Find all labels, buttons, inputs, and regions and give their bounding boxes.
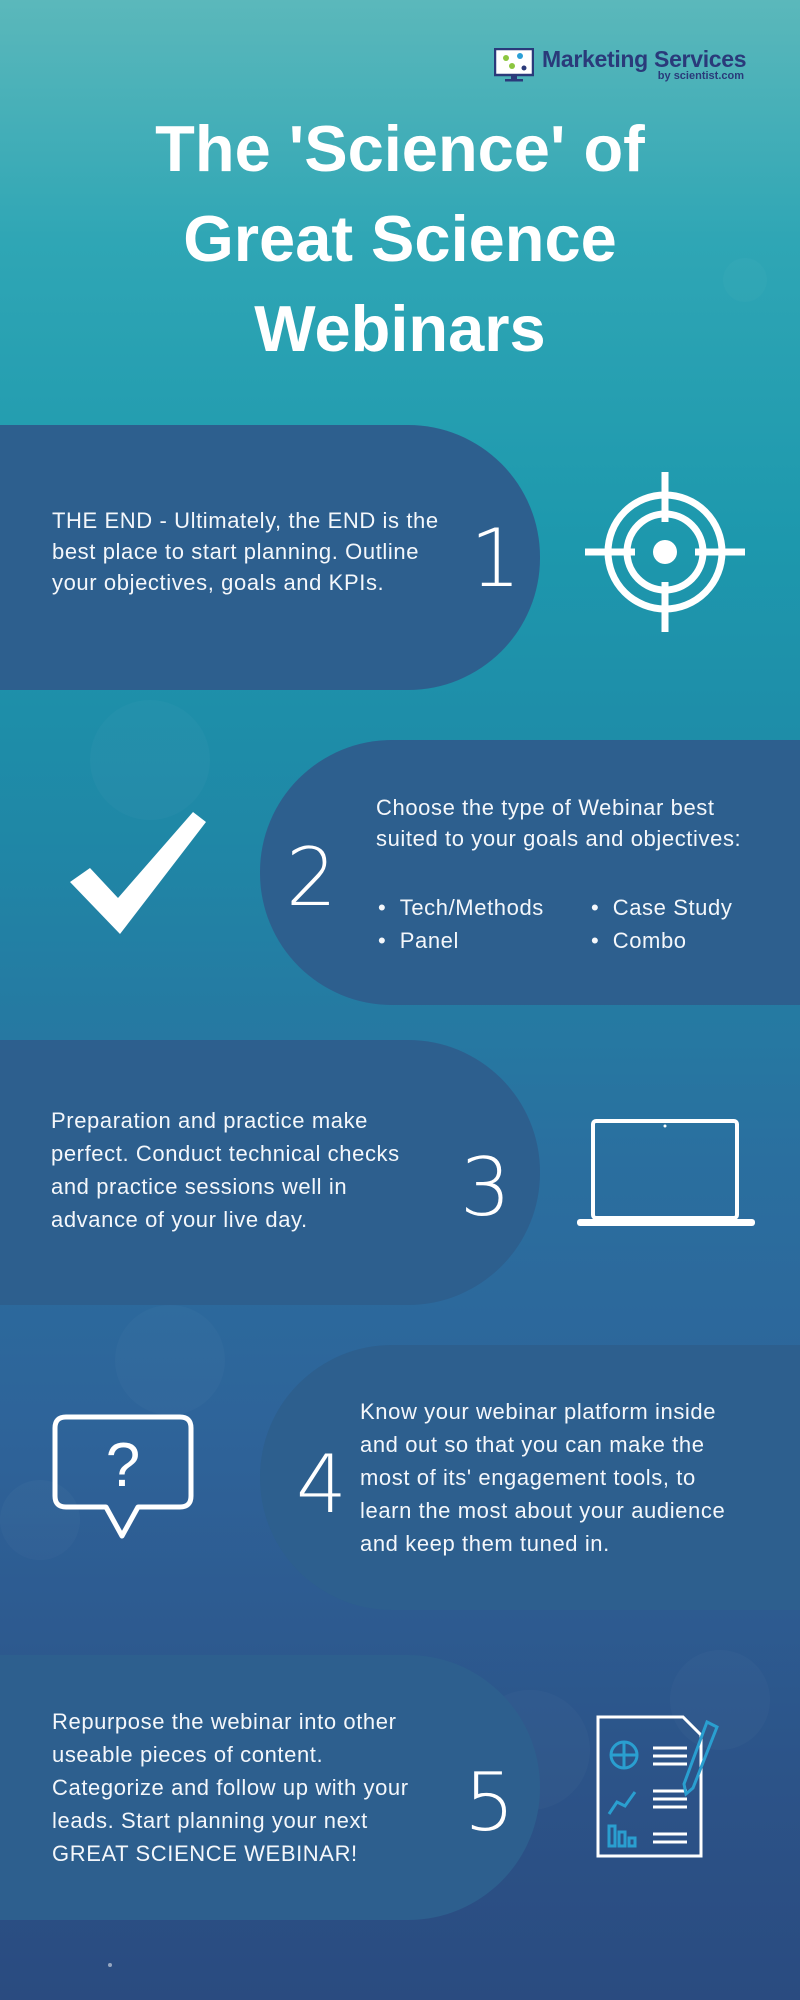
number 4: 4	[296, 1438, 347, 1531]
number 5: 5	[464, 1756, 515, 1849]
panel: step 2	[260, 740, 800, 1005]
text: step 1: best place to start planning. Outline	[52, 539, 419, 564]
title: The 'Science' of	[155, 112, 645, 185]
text: step 2: Choose the type of Webinar best	[376, 795, 715, 820]
text: step 4: and keep them tuned in.	[360, 1531, 610, 1556]
panel: step 4	[260, 1345, 800, 1610]
text: step 3: advance of your live day.	[51, 1207, 308, 1232]
text: step 3: and practice sessions well in	[51, 1174, 347, 1199]
text: step 3	[51, 1108, 400, 1232]
text: step 2	[376, 795, 741, 851]
text: step 5: Categorize and follow up with your	[52, 1775, 409, 1800]
number 2: 2	[286, 831, 337, 924]
icon: speech bubble	[52, 1414, 194, 1538]
title	[155, 112, 645, 365]
logo: Marketing Services	[542, 46, 746, 72]
bullet list: • Combo	[591, 928, 687, 953]
bullet list: • Panel	[378, 928, 459, 953]
number 3: 3	[460, 1141, 511, 1234]
panel: step 5	[0, 1655, 540, 1920]
title: Webinars	[254, 292, 546, 365]
icon: target	[585, 472, 745, 632]
text: step 4: learn the most about your audience	[360, 1498, 725, 1523]
panel: step 1	[0, 425, 540, 690]
text: step 1: THE END - Ultimately, the END is the	[52, 508, 439, 533]
icon: speech bubble: ?	[106, 1431, 140, 1500]
number 1: 1	[470, 512, 521, 605]
bullet list: • Case Study	[591, 895, 732, 920]
text: step 5: leads. Start planning your next	[52, 1808, 368, 1833]
text: step 1	[52, 508, 439, 595]
logo: by scientist.com	[658, 70, 744, 82]
panel: step 3	[0, 1040, 540, 1305]
text: step 3: Preparation and practice make	[51, 1108, 368, 1133]
logo	[494, 46, 746, 82]
text: step 4: most of its' engagement tools, to	[360, 1465, 696, 1490]
text: step 4	[360, 1399, 725, 1556]
icon: checkmark	[70, 812, 206, 934]
text: step 5: Repurpose the webinar into other	[52, 1709, 397, 1734]
icon: monitor	[494, 48, 534, 82]
title: Great Science	[183, 202, 617, 275]
text: step 2: suited to your goals and objectives:	[376, 826, 741, 851]
bullet list	[378, 895, 732, 953]
icon: laptop	[577, 1119, 755, 1226]
bullet list: • Tech/Methods	[378, 895, 544, 920]
text: step 5: GREAT SCIENCE WEBINAR!	[52, 1841, 358, 1866]
text: step 5: useable pieces of content.	[52, 1742, 323, 1767]
text: step 5	[52, 1709, 409, 1866]
icon: report document	[596, 1716, 719, 1858]
text: step 4: Know your webinar platform inside	[360, 1399, 716, 1424]
text: step 3: perfect. Conduct technical checks	[51, 1141, 400, 1166]
text: step 4: and out so that you can make the	[360, 1432, 705, 1457]
text: step 1: your objectives, goals and KPIs.	[52, 570, 384, 595]
